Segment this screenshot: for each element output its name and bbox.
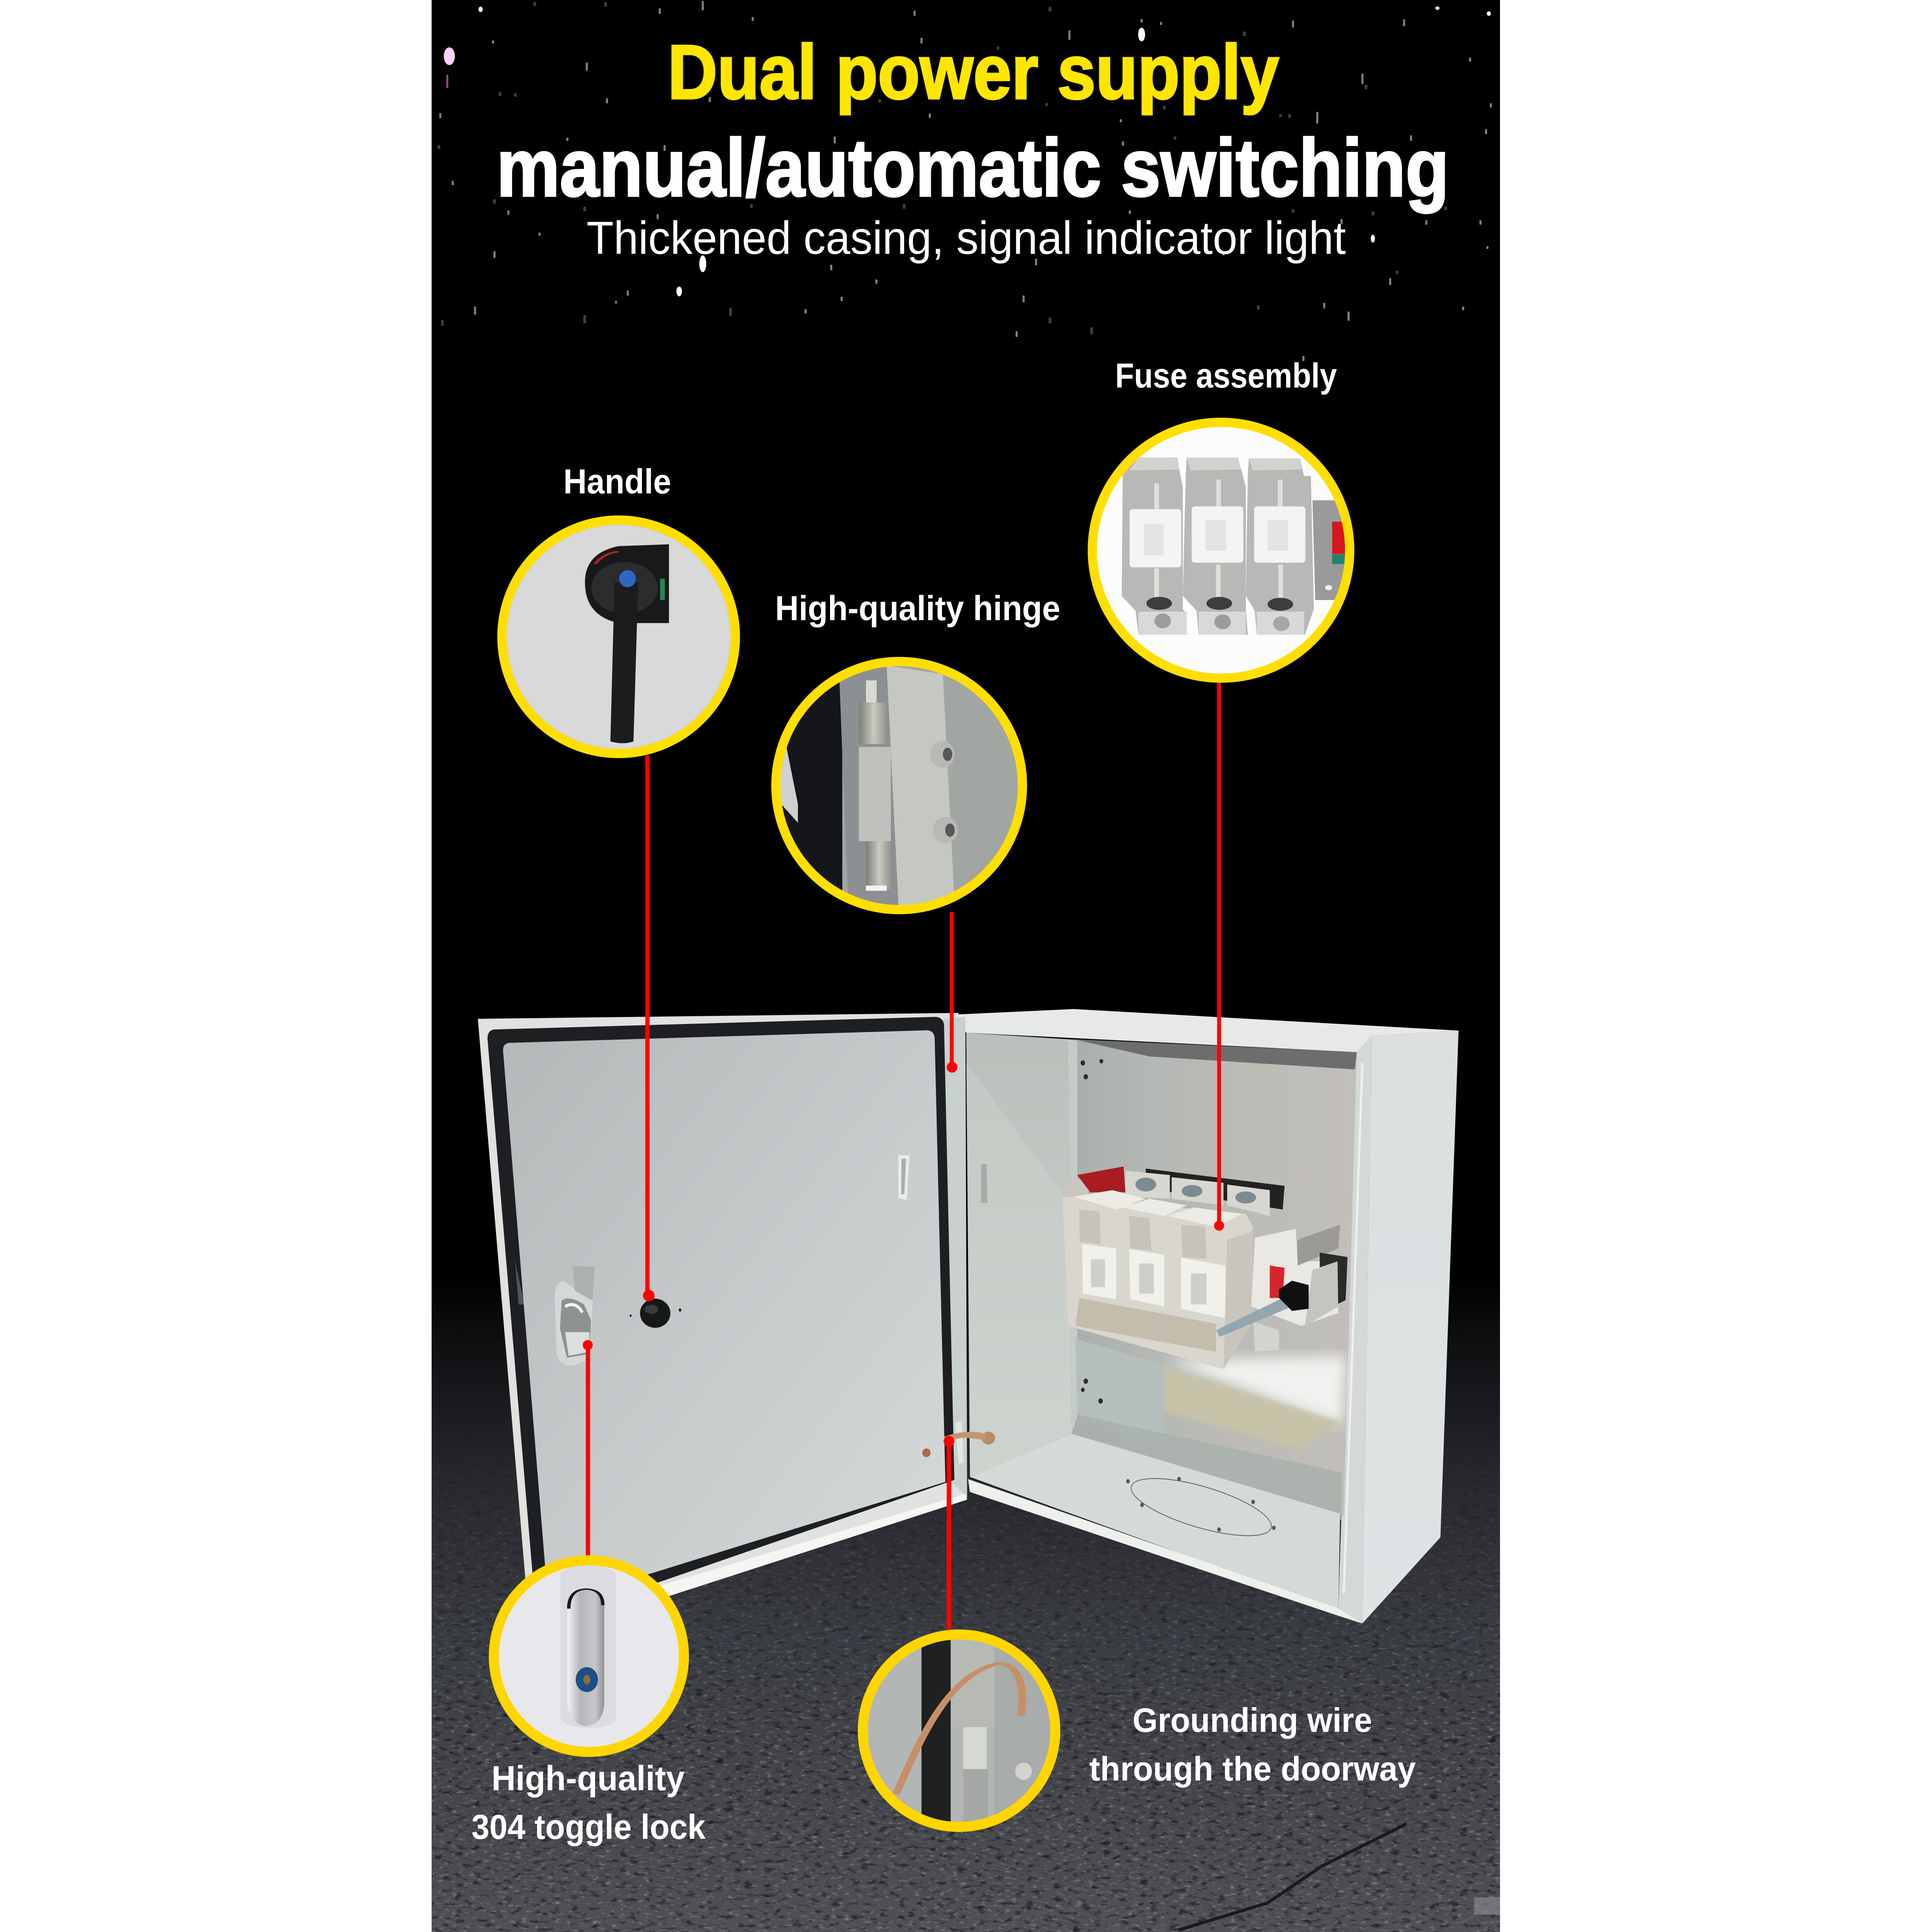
copper terminal xyxy=(922,1448,930,1457)
leader line: lock xyxy=(583,1340,593,1559)
handle knob on door xyxy=(630,1299,681,1328)
fuse switch assembly xyxy=(1063,1167,1347,1369)
hinge barrel xyxy=(859,680,893,891)
callout: grounding wire xyxy=(863,1629,1064,1835)
rubber gasket xyxy=(488,1017,954,1600)
enclosure body xyxy=(944,1009,1459,1624)
door xyxy=(478,1013,985,1600)
leader line: ground wire xyxy=(944,1436,954,1633)
starfield xyxy=(439,1,1491,361)
label: fuse assembly: Fuse assembly xyxy=(1115,357,1337,395)
back wall xyxy=(1068,1039,1357,1516)
label: toggle lock xyxy=(471,1759,706,1847)
label: grounding wire: Grounding wire xyxy=(1133,1701,1372,1739)
floor xyxy=(970,1434,1340,1611)
fuse holder 3 xyxy=(1246,458,1314,635)
right side xyxy=(1362,1031,1459,1624)
label: grounding wire: through the doorway xyxy=(1089,1750,1416,1788)
lower lit back wall xyxy=(1164,1356,1346,1425)
copper wire xyxy=(896,1663,1022,1794)
front frame xyxy=(1338,1036,1372,1624)
mounting holes xyxy=(1081,1059,1103,1404)
wall slot xyxy=(981,1164,987,1203)
label: handle: Handle xyxy=(563,463,671,501)
hinge xyxy=(963,1727,987,1769)
leader line: fuse xyxy=(1214,680,1224,1231)
label: toggle lock: 304 toggle lock xyxy=(471,1808,706,1847)
label: toggle lock: High-quality xyxy=(492,1759,685,1798)
fuse holder 1 xyxy=(1122,457,1187,635)
callout: fuse assembly xyxy=(1092,422,1350,678)
label: grounding wire xyxy=(1089,1701,1416,1788)
rotary handle xyxy=(585,544,669,743)
concrete ground xyxy=(432,1275,1500,1932)
latch xyxy=(555,1266,594,1366)
door tab xyxy=(898,1155,910,1200)
copper ground strap xyxy=(944,1435,988,1438)
lock key hex xyxy=(576,1667,598,1692)
leader line: hinge xyxy=(947,912,957,1073)
label: hinge: High-quality hinge xyxy=(775,589,1060,628)
infographic canvas xyxy=(432,0,1500,1932)
mounting plate with indicator xyxy=(1313,500,1346,600)
callout: toggle lock xyxy=(494,1560,684,1752)
page panel xyxy=(432,0,1500,1932)
door inner panel xyxy=(503,1030,946,1600)
callout: hinge xyxy=(771,656,1022,915)
leader line: handle xyxy=(643,755,655,1301)
title line 2: manual/automatic switching xyxy=(497,122,1449,213)
callout: handle xyxy=(502,520,735,753)
title xyxy=(497,29,1449,264)
subtitle: Thickened casing, signal indicator light xyxy=(587,212,1346,264)
door frame xyxy=(478,1013,967,1600)
top face xyxy=(953,1009,1459,1052)
screws xyxy=(930,741,955,768)
left inner wall xyxy=(966,1033,1072,1477)
fuse holder 2 xyxy=(1183,457,1248,635)
black backdrop xyxy=(432,0,1500,1275)
title line 1: Dual power supply xyxy=(668,29,1279,115)
